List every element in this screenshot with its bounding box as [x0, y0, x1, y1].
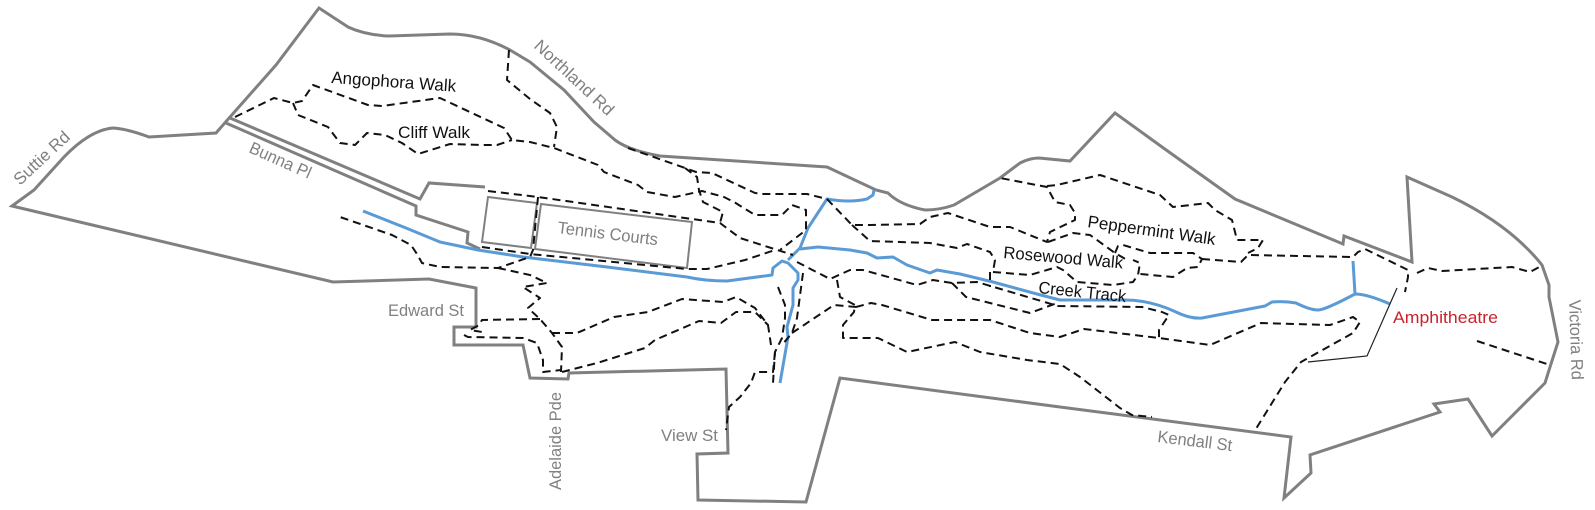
- creek north branch: [788, 190, 874, 260]
- Peppermint Walk track: [1047, 175, 1263, 253]
- Northland Rd track: [628, 148, 827, 199]
- Bunna Pl lower edge: [226, 123, 480, 249]
- amphitheatre outline: [1308, 288, 1397, 362]
- creek east branch: [800, 247, 1390, 318]
- Edward St upper track: [470, 319, 540, 332]
- walking tracks: [235, 50, 1550, 432]
- diagonal link: [792, 305, 856, 333]
- south-west cluster track: [498, 268, 562, 372]
- Edward St lower track: [464, 335, 561, 372]
- middle south track: [856, 303, 1360, 432]
- lower mid-west track: [562, 312, 768, 372]
- label: Amphitheatre: Amphitheatre: [1393, 308, 1498, 327]
- label: Victoria Rd: Victoria Rd: [1565, 299, 1587, 380]
- left court: [482, 197, 537, 248]
- label: Northland Rd: Northland Rd: [530, 36, 618, 119]
- label: Angophora Walk: Angophora Walk: [331, 68, 457, 96]
- creek: [363, 190, 1390, 383]
- creek amphitheatre spur: [1353, 261, 1355, 294]
- loop connector: [837, 280, 1152, 417]
- track north of tennis courts: [488, 191, 793, 255]
- link to tennis track: [685, 168, 723, 223]
- View St track: [726, 352, 775, 430]
- central track west: [773, 287, 785, 383]
- Rosewood Walk track: [993, 260, 1140, 285]
- label: Bunna Pl: Bunna Pl: [246, 138, 314, 182]
- Rosewood upper track: [852, 225, 995, 272]
- label: Suttie Rd: Suttie Rd: [10, 127, 74, 189]
- main creek west: [363, 211, 798, 383]
- Victoria Rd north track: [1417, 265, 1543, 273]
- label: Kendall St: Kendall St: [1157, 427, 1234, 455]
- label: View St: View St: [661, 426, 718, 445]
- north spur: [507, 50, 557, 147]
- label: Cliff Walk: Cliff Walk: [398, 123, 471, 142]
- eastern track: [1202, 249, 1408, 292]
- Rosewood lower north track: [827, 178, 1075, 242]
- Cliff Walk track: [293, 103, 512, 154]
- Peppermint inner track: [1115, 245, 1202, 277]
- Angophora Walk track: [235, 85, 806, 250]
- Rosewood tick: [989, 272, 991, 287]
- right court: [535, 204, 692, 268]
- track south of tennis courts: [482, 247, 775, 269]
- lower creek-side track: [952, 283, 1057, 313]
- central north-east and creek-side track: [797, 262, 1169, 338]
- track between courts: [340, 197, 538, 268]
- label: Rosewood Walk: Rosewood Walk: [1003, 243, 1124, 272]
- upper mid-west track: [552, 297, 771, 345]
- Bunna Pl upper edge: [230, 118, 485, 199]
- label: Peppermint Walk: Peppermint Walk: [1086, 212, 1217, 249]
- label: Tennis Courts: Tennis Courts: [557, 218, 659, 249]
- Victoria Rd south track: [1477, 341, 1550, 365]
- Rosewood north link: [1048, 233, 1127, 260]
- central track east: [782, 273, 803, 345]
- label: Edward St: Edward St: [388, 301, 464, 320]
- tennis courts: [482, 197, 692, 268]
- label: Creek Track: Creek Track: [1038, 278, 1128, 306]
- label: Adelaide Pde: Adelaide Pde: [546, 392, 565, 490]
